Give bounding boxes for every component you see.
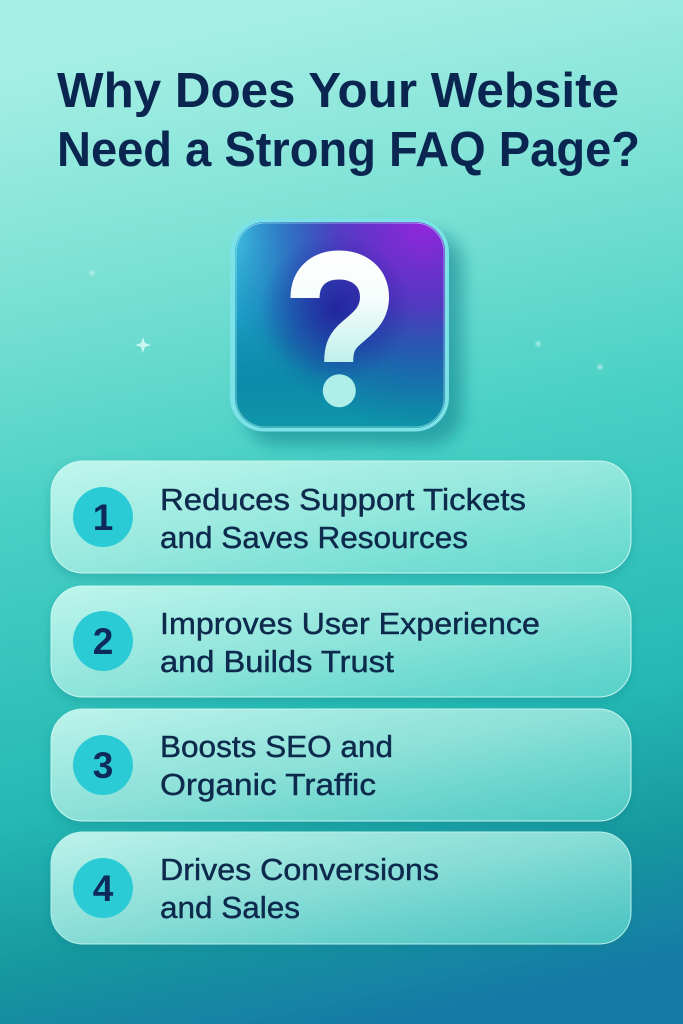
text: item 3: Boosts SEO and [160,730,393,764]
text: item 2 [160,607,540,679]
title: Why Does Your Website [57,64,619,118]
text: item 2: and Builds Trust [160,645,395,679]
text: item 3 [160,730,393,802]
text: item 1: and Saves Resources [160,521,468,555]
text: item 4: Drives Conversions [160,853,439,887]
text: item 4: and Sales [160,891,300,925]
panel: item 4 [51,832,631,948]
text: item 4 [160,853,439,925]
icon: question mark glyph [305,265,374,407]
text: item 1: Reduces Support Tickets [160,483,526,517]
number badge 3: 3 [93,745,113,786]
text: item 2: Improves User Experience [160,607,540,641]
icon: question mark card [230,218,463,445]
number badge 2: 2 [93,621,113,662]
number badge 4 [73,858,133,918]
text: item 3: Organic Traffic [160,768,376,802]
number badge 3 [73,735,133,795]
panel: item 3 [51,709,631,825]
number badge 4: 4 [93,868,114,909]
panel: item 2 [51,586,631,701]
title: Need a Strong FAQ Page? [57,123,640,177]
decorative sparkles [90,270,602,370]
number badge 1 [73,487,133,547]
number badge 1: 1 [93,497,113,538]
text: item 1 [160,483,526,555]
number badge 2 [73,611,133,671]
title [57,64,640,177]
panel: item 1 [51,461,631,577]
